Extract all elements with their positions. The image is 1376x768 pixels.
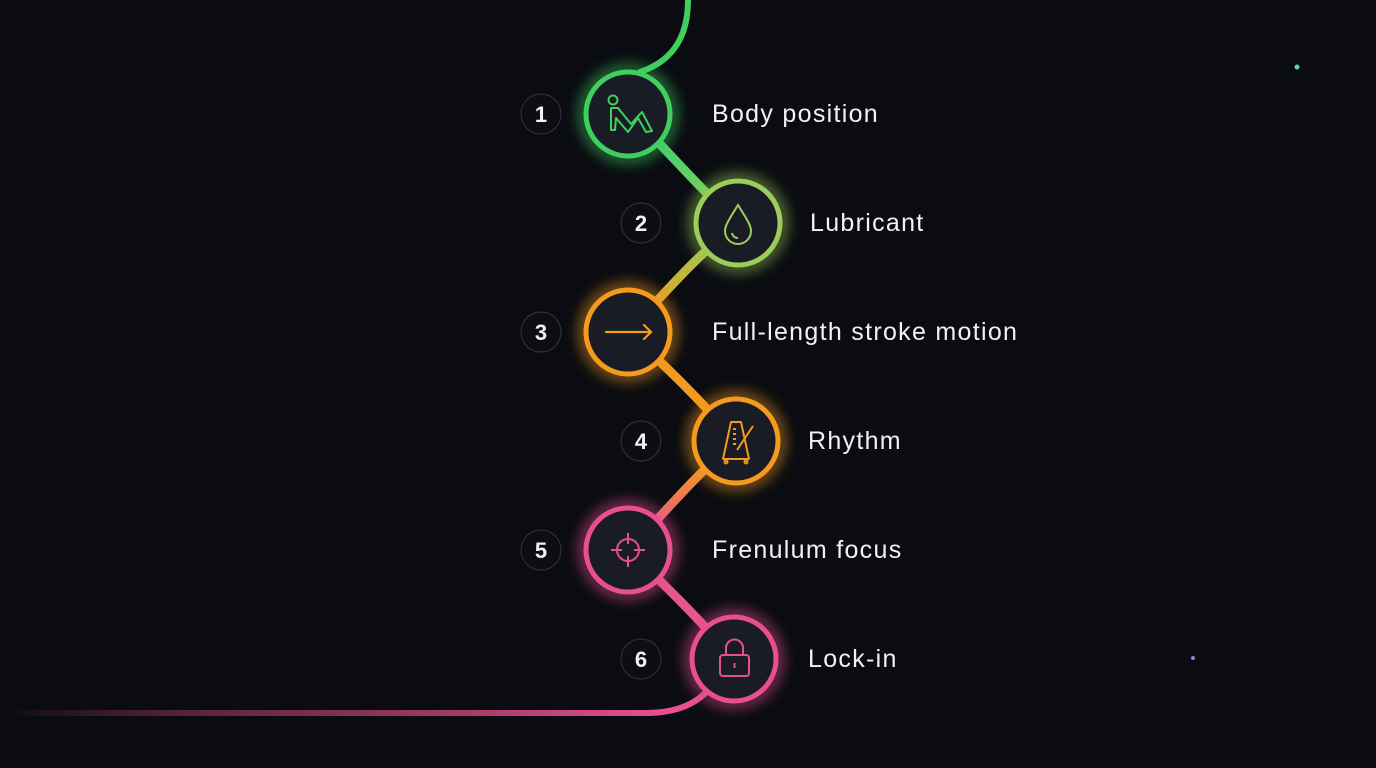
step 2 circle: lubricant — [696, 181, 780, 265]
label 6: Lock-in — [808, 645, 898, 673]
flow diagram: 2 — [635, 211, 647, 236]
flow diagram: 6 — [635, 647, 647, 672]
step 3 circle: arrow — [586, 290, 670, 374]
flow diagram: 5 — [535, 538, 547, 563]
step 1 circle: body position — [586, 72, 670, 156]
step 4 circle: metronome — [694, 399, 778, 483]
label 2: Lubricant — [810, 209, 925, 237]
label 1: Body position — [712, 100, 879, 128]
step 5 circle: target — [586, 508, 670, 592]
step 6 circle: lock — [692, 617, 776, 701]
connector path — [20, 0, 738, 713]
glows — [584, 70, 782, 703]
label 4: Rhythm — [808, 427, 902, 455]
number badges — [521, 94, 661, 679]
flow diagram: 1 — [535, 102, 547, 127]
flow diagram: 3 — [535, 320, 547, 345]
label 3: Full-length stroke motion — [712, 318, 1018, 346]
decorative dots — [1294, 64, 1300, 70]
label 5: Frenulum focus — [712, 536, 902, 564]
flow diagram: 4 — [635, 429, 648, 454]
